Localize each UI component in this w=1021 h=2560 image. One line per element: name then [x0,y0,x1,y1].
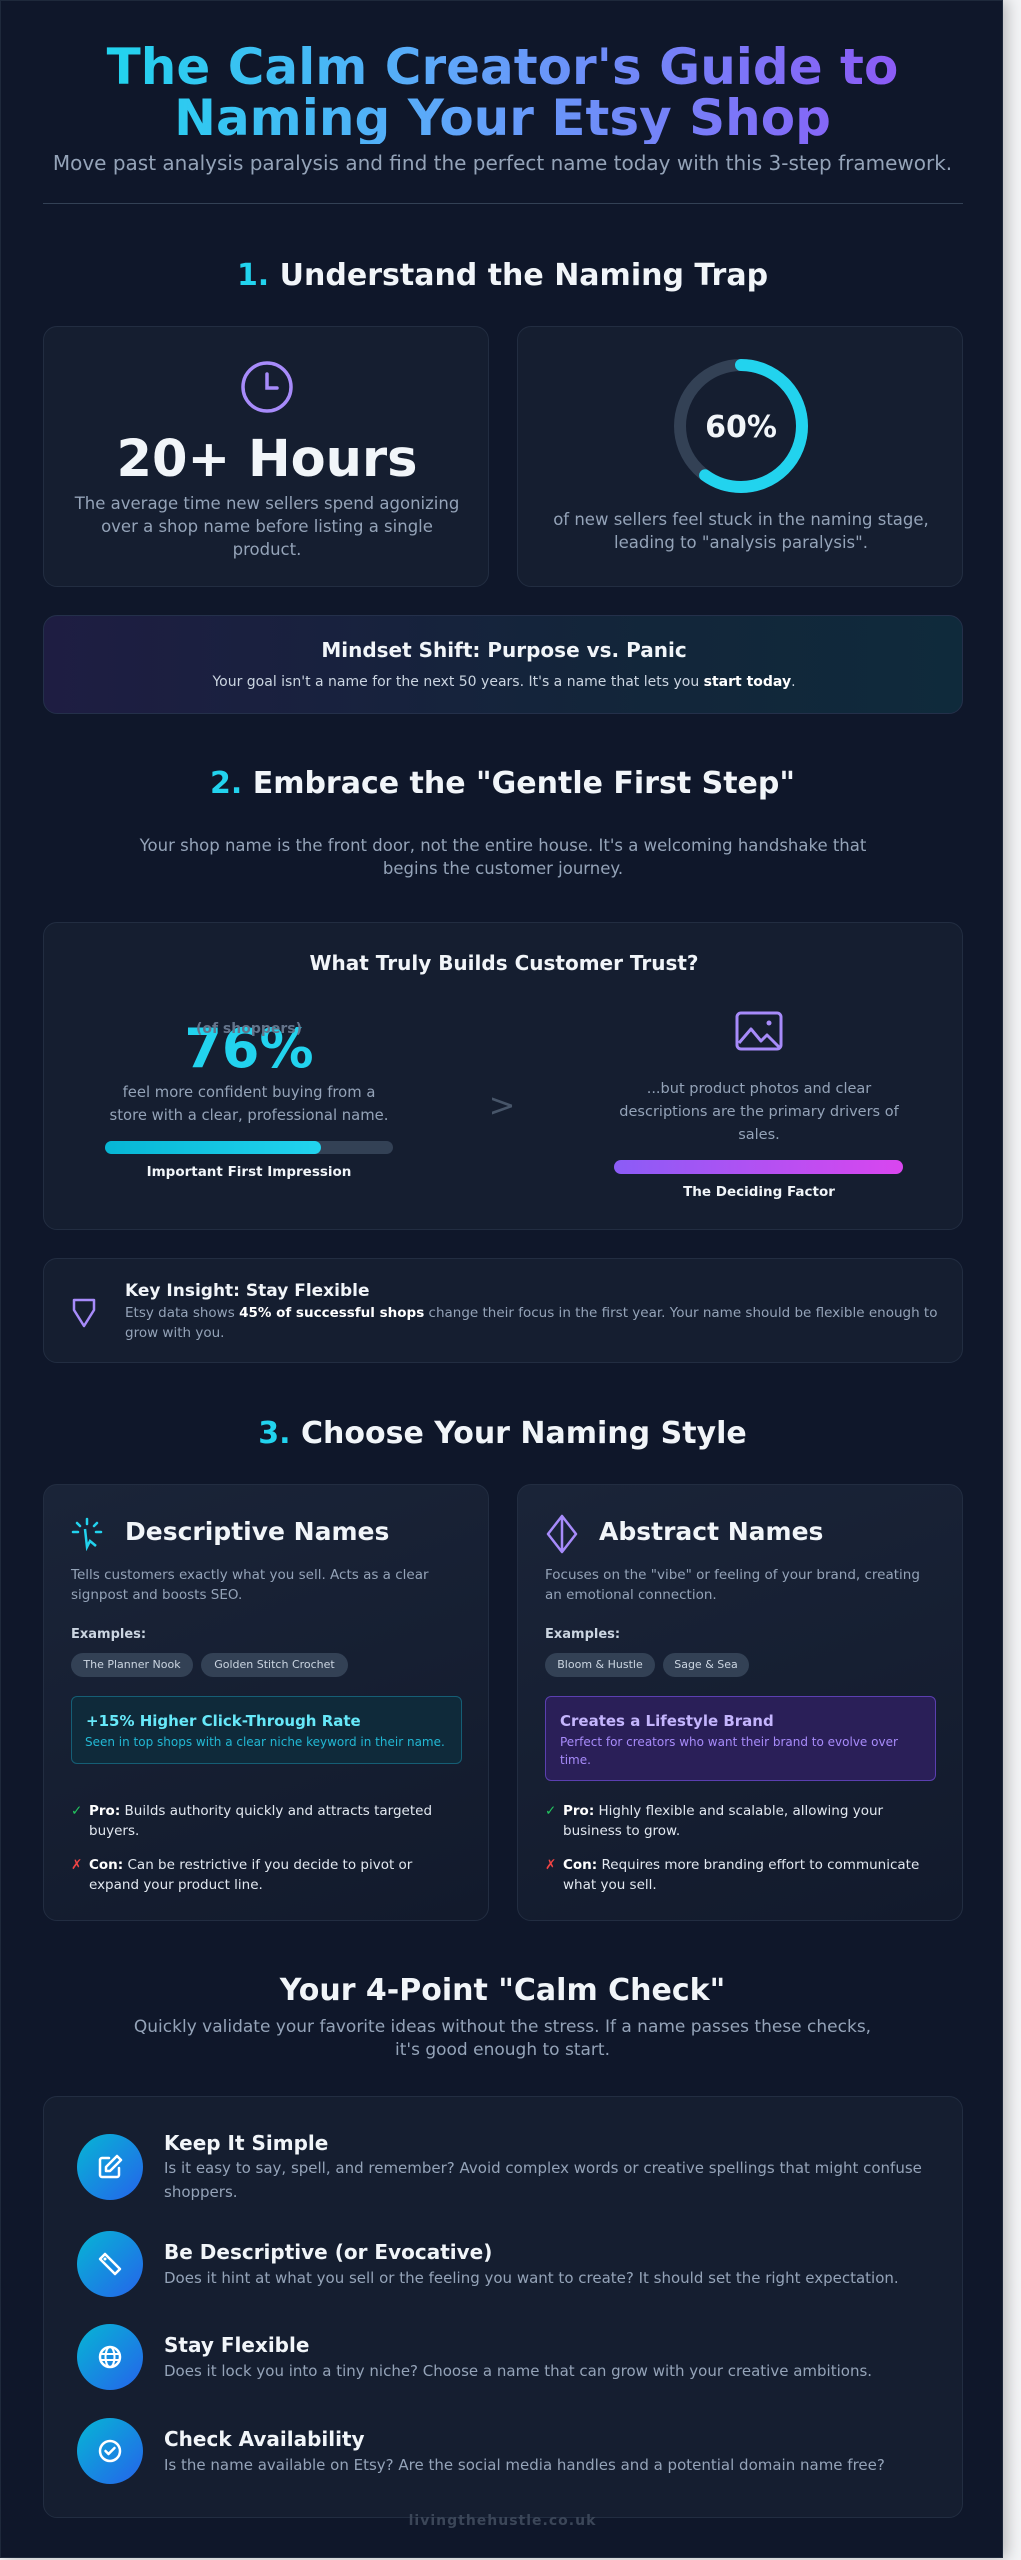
callout: mindset shift [43,615,963,714]
arrow: > [489,1086,515,1124]
callout: lifestyle brand: Creates a Lifestyle Brand [560,1712,774,1730]
bar: deciding factor [614,1160,903,1174]
panel: abstract names: Focuses on the "vibe" or feeling of your brand, creating an emotional connection. [545,1567,920,1603]
list: pros and cons: Pro: Builds authority quickly and attracts targeted buyers. [89,1803,432,1839]
panel: checklist [43,2096,963,2518]
bar: first impression [105,1141,393,1154]
icon: pin [72,1298,96,1328]
list: pros and cons: Con: Requires more branding effort to communicate what you sell. [563,1857,919,1893]
tags: Sage & Sea [674,1658,738,1671]
panel: 20+ hours [43,326,489,587]
tags: The Planner Nook [83,1658,181,1671]
title [41,42,964,144]
footer: livingthehustle.co.uk [409,2513,596,2529]
text: hours description: The average time new sellers spend agonizing over a shop name before listing a single product. [75,494,459,559]
icon: tag [77,2231,143,2297]
panel: customer trust [43,922,963,1230]
title: Naming Your Etsy Shop [174,89,831,147]
callout: click-through stat: Seen in top shops with a clear niche keyword in their name. [85,1735,445,1749]
label: deciding factor: The Deciding Factor [683,1184,835,1200]
icon: check circle [77,2418,143,2484]
tags: Bloom & Hustle [557,1658,643,1671]
text: stay flexible: Stay Flexible [164,2333,309,2357]
list: pros and cons: Con: Can be restrictive if you decide to pivot or expand your product line. [89,1857,412,1893]
panel: descriptive names: Descriptive Names [125,1517,389,1546]
panel: abstract names: Examples: [545,1627,620,1642]
label: important first impression: Important First Impression [147,1164,351,1180]
panel: descriptive names: Examples: [71,1627,146,1642]
text: keep it simple: Keep It Simple [164,2131,328,2155]
chart: donut 60% [674,359,808,493]
text: be descriptive: Be Descriptive (or Evocative) [164,2240,492,2264]
list: pros and cons [71,1803,432,1893]
heading: section 1: 1. Understand the Naming Trap [237,258,768,293]
tags [71,1653,348,1677]
icon: diamond [546,1514,578,1554]
title: The Calm Creator's Guide to [107,38,898,96]
panel: abstract names: Abstract Names [599,1517,823,1546]
tags: Golden Stitch Crochet [214,1658,335,1671]
icon: clock [241,361,293,413]
callout: lifestyle brand [545,1696,936,1781]
panel: abstract names [517,1484,963,1921]
stat: 76%: (of shoppers) [196,1021,302,1037]
heading: section 2: 2. Embrace the "Gentle First Step" [210,766,795,801]
heading: calm check: Your 4-Point "Calm Check" [280,1973,725,2008]
icon: pencil [77,2134,143,2200]
callout: key insight [43,1258,963,1363]
panel: descriptive names: Tells customers exactly what you sell. Acts as a clear signpost and boosts SEO. [71,1567,429,1603]
callout: mindset shift: Your goal isn't a name for the next 50 years. It's a name that lets you start today. [212,674,796,690]
panel: descriptive names [43,1484,489,1921]
checklist items: Does it lock you into a tiny niche? Choose a name that can grow with your creative ambitions. [164,2362,872,2380]
list: pros and cons: Pro: Highly flexible and scalable, allowing your business to grow. [563,1803,883,1839]
subtitle: Move past analysis paralysis and find the perfect name today with this 3-step framework. [53,151,952,175]
list: pros and cons: ✗ [71,1857,82,1873]
text: stuck description: of new sellers feel stuck in the naming stage, leading to "analysis paralysis". [553,510,929,552]
checklist items [77,2131,922,2484]
text: section 2 intro: Your shop name is the front door, not the entire house. It's a welcoming handshake that begins the customer journey. [140,836,866,878]
list: pros and cons [545,1803,919,1893]
panel: 60% stuck [517,326,963,587]
list: pros and cons: ✓ [545,1803,556,1819]
chart: donut 60%: 60% [705,410,777,445]
checklist items: Does it hint at what you sell or the feeling you want to create? It should set the right expectation. [164,2269,899,2287]
checklist items: Is the name available on Etsy? Are the social media handles and a potential domain name free? [164,2456,885,2474]
callout: key insight: Key Insight: Stay Flexible [125,1281,370,1301]
callout: key insight: Etsy data shows 45% of successful shops change their focus in the first year. Your name should be flexible enough to grow with you. [125,1305,938,1341]
text: 76% description: feel more confident buying from a store with a clear, professional name. [110,1084,388,1124]
stat: 76%: 76% [184,1017,314,1080]
checklist items: Is it easy to say, spell, and remember? Avoid complex words or creative spellings that might confuse shoppers. [164,2159,922,2201]
heading: trust: What Truly Builds Customer Trust? [309,951,699,975]
stat: 20+ hours: 20+ Hours [116,430,418,489]
icon: cursor click [72,1518,102,1551]
text: calm check intro: Quickly validate your favorite ideas without the stress. If a name passes these checks, it's good enough to start. [134,2017,871,2060]
callout: mindset shift: Mindset Shift: Purpose vs. Panic [321,638,687,662]
callout: click-through stat: +15% Higher Click-Through Rate [86,1712,361,1730]
icon: image [736,1012,782,1050]
tags [545,1653,749,1677]
icon: globe [77,2324,143,2390]
callout: lifestyle brand: Perfect for creators who want their brand to evolve over time. [560,1735,898,1767]
text: check availability: Check Availability [164,2427,365,2451]
heading: section 3: 3. Choose Your Naming Style [258,1416,747,1451]
list: pros and cons: ✓ [71,1803,82,1819]
list: pros and cons: ✗ [545,1857,556,1873]
callout: click-through stat [71,1696,462,1764]
text: photos description: ...but product photos and clear descriptions are the primary drivers of sales. [619,1081,899,1143]
